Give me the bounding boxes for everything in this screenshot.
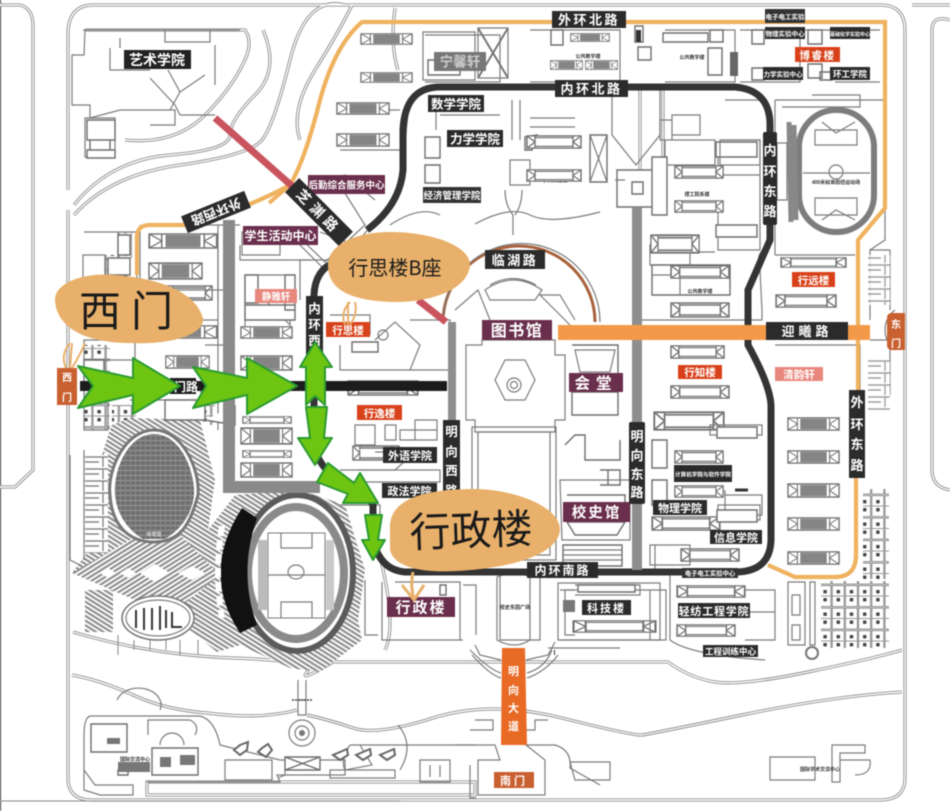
label: linhu road <box>485 250 545 269</box>
library and central plaza: 校史东园广场 <box>500 604 530 611</box>
callout: xingsi building B bubble: 行思楼B座 <box>348 252 442 281</box>
label: inner ring east road: 环 <box>763 164 777 179</box>
label: environmental school <box>830 67 870 80</box>
label: student activity center: 学生活动中心 <box>244 228 317 243</box>
label: sunrise road <box>766 322 848 340</box>
arrow: south to administration <box>362 515 385 560</box>
label: law and politics school: 政法学院 <box>388 484 432 498</box>
gym oval: 体育馆 <box>146 531 162 538</box>
label: electronics lab <box>765 9 805 23</box>
callout: administration building bubble: 行政楼 <box>408 495 533 559</box>
track field east <box>777 95 895 410</box>
label: inner ring west road: 西 <box>308 334 321 348</box>
label: physics school: 物理学院 <box>658 501 702 515</box>
grey avenues <box>229 207 637 570</box>
label: computer school: 计算机学院与软件学院 <box>675 470 731 478</box>
label: east gate <box>887 313 905 350</box>
label: west gate <box>57 368 77 405</box>
label: logistics center: 后勤综合服务中心 <box>308 180 385 192</box>
callout: west gate bubble: 西 <box>79 278 121 339</box>
outer ring road <box>137 22 885 577</box>
label: library: 图书馆 <box>491 321 543 340</box>
label: law and politics school <box>382 483 437 498</box>
campus building outlines north: 公共教学楼 <box>679 54 705 61</box>
label: mingxiang east road: 路 <box>630 485 644 500</box>
label: ningxin dining: 宁馨轩 <box>440 54 481 70</box>
label: electronics center: 电子电工实验中心 <box>685 568 736 578</box>
label: outer ring west road: 外环西路 <box>189 195 243 228</box>
campus building outlines north: 学科实验楼 <box>542 177 568 184</box>
label: south gate: 南门 <box>500 774 528 788</box>
campus building outlines north: 公共教学楼 <box>687 288 713 295</box>
label: foreign languages school <box>383 447 437 463</box>
label: computer school <box>674 465 732 482</box>
label: inner ring east road: 东 <box>763 184 777 199</box>
label: physics lab <box>765 27 805 39</box>
label: environmental school: 环工学院 <box>833 69 867 79</box>
label: mingxiang west road: 路 <box>445 483 458 498</box>
academic building blocks <box>243 100 846 660</box>
inner ring road <box>314 87 771 572</box>
label: history museum <box>563 502 630 522</box>
library and central plaza: 国际学术交流中心 <box>800 766 840 773</box>
callout: xingsi building B bubble <box>328 232 470 325</box>
small oval court <box>118 596 198 655</box>
label: mingxiang avenue: 大 <box>508 701 519 715</box>
grid of student housing southeast <box>788 489 889 659</box>
callout: administration building bubble <box>390 489 560 600</box>
label: zhiyuan road <box>285 178 353 246</box>
west side small buildings <box>84 225 218 430</box>
label: xingzhi building <box>678 365 722 379</box>
label: xingzhi building: 行知楼 <box>684 366 716 379</box>
label: outer ring north road: 外环北路 <box>558 12 620 28</box>
west gate road <box>80 381 447 391</box>
label: inner ring east road: 路 <box>763 204 777 219</box>
label: borui building <box>795 47 840 62</box>
route arrows green <box>78 342 385 560</box>
label: outer ring west road <box>181 191 251 233</box>
label: borui building: 博睿楼 <box>800 49 836 62</box>
label: outer ring east road: 东 <box>850 437 864 452</box>
label: administration building <box>387 597 455 617</box>
label: history museum: 校史馆 <box>572 504 621 522</box>
label: qingyun dining: 清韵轩 <box>783 368 815 381</box>
arrow: southeast tail <box>317 463 378 503</box>
arrow: west gate east one <box>78 358 180 414</box>
label: inner ring west road: 环 <box>308 318 321 332</box>
label: auditorium <box>569 373 623 392</box>
south garden buildings <box>84 680 450 795</box>
label: sunrise road: 迎曦路 <box>781 324 833 339</box>
label: mingxiang avenue: 向 <box>508 683 519 697</box>
label: inner ring east road <box>763 132 777 225</box>
label: mingxiang avenue: 道 <box>508 719 519 733</box>
label: chemistry lab: 基础化学实验中心 <box>830 31 870 38</box>
label: electronics lab: 电子电工实验 <box>766 12 805 21</box>
label: inner ring east road: 内 <box>763 143 777 158</box>
label: administration building: 行政楼 <box>395 598 447 616</box>
label: economics school <box>423 187 481 203</box>
label: mingxiang east road: 向 <box>630 448 644 463</box>
label: mingxiang east road: 明 <box>630 429 644 444</box>
label: xingyuan building <box>792 272 835 287</box>
label: west gate: 西 <box>62 372 72 384</box>
label: zhiyuan road: 芝渊路 <box>293 186 345 238</box>
label: inner ring north road: 内环北路 <box>560 82 623 96</box>
label: mechanics lab <box>763 67 803 80</box>
gym oval <box>70 430 198 632</box>
label: chemistry lab <box>830 27 870 39</box>
main stadium <box>218 495 353 651</box>
label: xingsi building: 行思楼 <box>332 324 364 337</box>
label: south gate <box>494 772 534 788</box>
label: xingyi building <box>357 405 402 420</box>
label: xingsi building <box>326 322 370 337</box>
arrow: south along ring road <box>298 407 332 465</box>
label: mingxiang west road: 向 <box>445 444 458 459</box>
label: qingyun dining <box>775 367 823 381</box>
label: mingxiang east road <box>629 422 645 504</box>
building detail west <box>83 215 440 530</box>
label: east gate: 门 <box>891 337 901 350</box>
label: mingxiang west road: 西 <box>445 464 458 478</box>
sunrise avenue <box>558 325 870 340</box>
label: mingxiang east road: 东 <box>630 467 644 482</box>
label: mathematics school: 数学学院 <box>431 96 481 112</box>
label: west gate: 门 <box>62 391 72 404</box>
label: mechanics lab: 力学实验中心 <box>764 70 803 78</box>
label: mingxiang west road: 明 <box>445 425 458 439</box>
library and central plaza <box>343 244 870 798</box>
south garden buildings: 国际交流中心 <box>120 756 150 763</box>
label: xingyi building: 行逸楼 <box>364 407 396 420</box>
campus building outlines north: 理工院系楼 <box>684 191 710 198</box>
label: library <box>482 320 552 340</box>
label: mingxiang west road <box>443 420 460 502</box>
label: physics lab: 物理实验中心 <box>766 29 805 38</box>
striped plaza <box>72 418 365 672</box>
label: outer ring east road: 外 <box>850 395 864 410</box>
pink connector roads <box>215 118 446 322</box>
label: physics school <box>653 500 707 515</box>
label: economics school: 经济管理学院 <box>423 190 481 202</box>
label: east gate: 东 <box>891 318 901 331</box>
label: foreign languages school: 外语学院 <box>388 448 432 462</box>
label: outer ring east road: 路 <box>850 458 864 473</box>
callout: west gate bubble <box>55 274 203 368</box>
track field east: 400米标准田径运动场 <box>812 179 860 186</box>
label: inner ring west road: 内 <box>308 301 321 316</box>
label: outer ring east road <box>849 390 865 478</box>
label: inner ring south road <box>527 562 598 578</box>
label: science building: 科技楼 <box>587 601 626 615</box>
arrow: north to xingsi building <box>300 342 332 405</box>
label: jingya dining <box>255 289 297 303</box>
label: xingyuan building: 行远楼 <box>798 274 830 287</box>
label: art college: 艺术学院 <box>129 52 185 68</box>
label: science building <box>582 600 631 615</box>
label: inner ring west road <box>306 296 323 366</box>
campus building outlines north <box>72 26 885 395</box>
label: textile school: 轻纺工程学院 <box>679 604 749 618</box>
label: information school: 信息学院 <box>714 530 758 544</box>
label: engineering training center: 工程训练中心 <box>705 646 756 656</box>
label: ningxin dining <box>434 52 486 71</box>
label: mingxiang avenue: 明 <box>508 665 519 678</box>
campus building outlines north: 公共教学楼 <box>575 53 601 60</box>
label: inner ring south road: 内环南路 <box>534 562 591 578</box>
label: linhu road: 临湖路 <box>492 253 538 268</box>
label: electronics center <box>682 568 738 578</box>
callout: west gate bubble: 门 <box>131 278 173 339</box>
label: logistics center <box>308 175 385 194</box>
arrow: west gate east two <box>193 358 297 414</box>
label: auditorium: 会堂 <box>574 374 618 392</box>
label: outer ring east road: 环 <box>850 417 864 432</box>
dormitory blocks <box>149 34 839 564</box>
label: jingya dining: 静雅轩 <box>262 291 291 303</box>
label: mingxiang avenue <box>501 648 527 745</box>
label: west gate road sign: 门路 <box>174 379 198 394</box>
label: mechanics school: 力学学院 <box>450 132 500 146</box>
